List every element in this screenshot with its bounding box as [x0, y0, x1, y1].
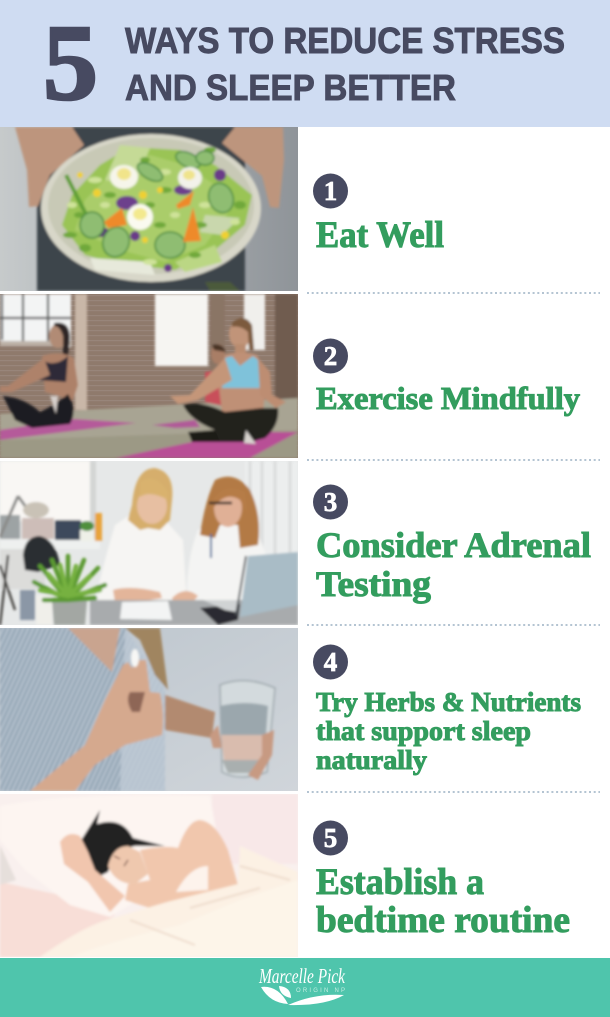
- number badge 3: [313, 484, 348, 520]
- number badge 3: 3: [324, 487, 337, 517]
- red-haired doctor: [172, 477, 268, 608]
- number badge 5: [313, 820, 348, 856]
- far arm: [165, 695, 215, 738]
- heading: Try Herbs and Nutrients: Try Herbs & Nutrients: [316, 687, 581, 717]
- bed sheet left: [0, 882, 115, 957]
- arm on pillow: [60, 834, 125, 912]
- left hand: [15, 127, 84, 207]
- step 5: [313, 820, 570, 941]
- corn: [77, 172, 229, 243]
- photo: salad plate held in hands: [0, 127, 298, 291]
- heading: Establish a bedtime routine: bedtime routine: [316, 900, 570, 941]
- back woman in red: [211, 344, 225, 364]
- salad leaves: [62, 147, 252, 270]
- title: WAYS TO REDUCE STRESS: [125, 20, 565, 61]
- heading: Consider Adrenal Testing: [316, 525, 591, 604]
- photo: women meditating in a studio: [0, 294, 298, 458]
- heading: Consider Adrenal Testing: Consider Adrenal: [316, 525, 591, 565]
- chair: [23, 536, 60, 572]
- laptop: [240, 552, 298, 617]
- blonde doctor: [95, 468, 186, 605]
- floor: [0, 396, 298, 440]
- pill: [131, 649, 139, 667]
- number badge 4: 4: [324, 647, 337, 677]
- leaf texture: [63, 147, 246, 258]
- eggs: [110, 165, 138, 189]
- dotted dividers: [307, 293, 600, 792]
- near arm and hand: [30, 660, 163, 791]
- orange carrot: [104, 208, 127, 228]
- shelf items: [22, 518, 54, 539]
- step 2: [313, 338, 580, 416]
- icon: leaves: [261, 986, 344, 1005]
- number badge 4: [313, 644, 348, 680]
- heading: Try Herbs and Nutrients: [316, 687, 581, 775]
- photo: two doctors reviewing documents: [0, 461, 298, 625]
- title: AND SLEEP BETTER: [125, 67, 456, 108]
- number badge 2: [313, 338, 348, 374]
- heading: Consider Adrenal Testing: Testing: [316, 564, 431, 604]
- photo: hand holding pill and glass of water: [0, 628, 298, 791]
- heading: Exercise Mindfully: Exercise Mindfully: [316, 380, 580, 416]
- heading: Eat Well: Eat Well: [316, 215, 444, 256]
- face: [108, 846, 148, 884]
- logo: Marcelle Pick Origin NP: ORIGIN NP: [296, 988, 345, 994]
- purple cabbage: [116, 196, 138, 210]
- heading: Try Herbs and Nutrients: that support sleep: [316, 716, 531, 746]
- big number 5: 5: [43, 4, 98, 123]
- footer band: [0, 958, 610, 1017]
- pink mats: [0, 419, 136, 440]
- desk: [0, 539, 100, 549]
- heading: Try Herbs and Nutrients: naturally: [316, 745, 428, 775]
- step 3: [313, 484, 591, 604]
- header band: [0, 0, 610, 127]
- number badge 5: 5: [324, 823, 337, 853]
- chest and shoulder: [125, 820, 240, 908]
- glass table and papers: [90, 600, 298, 625]
- cucumbers: [80, 148, 237, 261]
- step 1: [313, 174, 444, 256]
- step 4: [313, 644, 581, 775]
- photo: woman sleeping in white bed: [0, 794, 298, 957]
- right hand: [222, 127, 284, 208]
- plant pot: [52, 600, 87, 625]
- heading: Establish a bedtime routine: Establish a: [316, 862, 484, 903]
- plant leaves: [34, 556, 105, 600]
- lamp: [0, 496, 28, 537]
- fingers around glass: [248, 730, 274, 780]
- sheet at chest: [176, 866, 208, 892]
- right woman: [170, 318, 286, 444]
- left woman: [0, 323, 78, 428]
- title: [125, 20, 565, 108]
- neck skin: [68, 628, 120, 672]
- cream bedding: [40, 846, 298, 957]
- number badge 2: 2: [324, 341, 337, 371]
- glass: [220, 681, 275, 777]
- heading: Establish a bedtime routine: [316, 862, 570, 941]
- number badge 1: 1: [324, 176, 337, 206]
- plate: [41, 134, 261, 282]
- windows: [0, 294, 71, 347]
- hair: [125, 628, 168, 690]
- hair: [80, 810, 165, 876]
- logo: Marcelle Pick Origin NP: Marcelle Pick: [258, 964, 345, 988]
- pillow: [58, 810, 214, 918]
- logo: Marcelle Pick Origin NP: [258, 964, 345, 1005]
